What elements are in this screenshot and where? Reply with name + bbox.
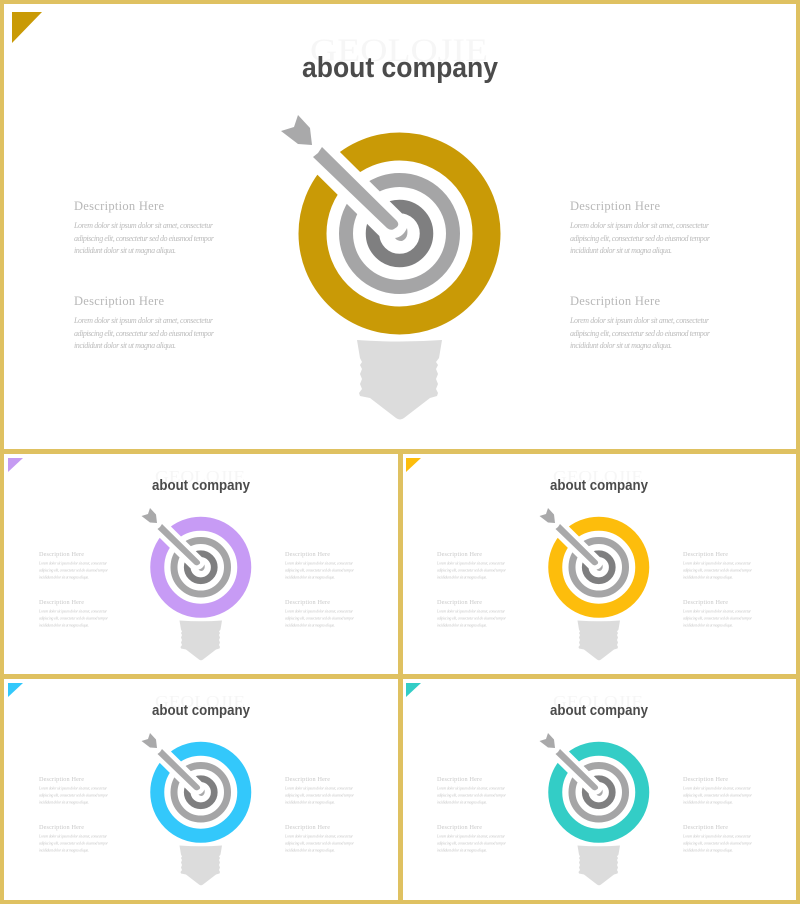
ghost heading: GEOLOJIE xyxy=(155,692,245,711)
text block: top right: adipiscing elit, consectetur sed do eiusmod tempor xyxy=(683,794,753,798)
text block: top right: adipiscing elit, consectetur sed do eiusmod tempor xyxy=(570,234,711,243)
text block: top left: Description Here xyxy=(437,776,482,783)
text block: bottom left: Description Here xyxy=(437,599,482,606)
ghost heading: GEOLOJIE xyxy=(553,467,643,486)
text block: bottom left xyxy=(436,824,507,852)
title: about company xyxy=(152,703,250,719)
text block: bottom right xyxy=(569,294,711,350)
text block: top right: incididunt dolor sit ut magna aliqua. xyxy=(683,800,733,804)
icon: lightbulb target with arrow xyxy=(281,115,486,420)
text block: bottom left: incididunt dolor sit ut magna aliqua. xyxy=(39,848,89,852)
text block: bottom left: adipiscing elit, consectetur sed do eiusmod tempor xyxy=(74,329,215,338)
text block: top left: adipiscing elit, consectetur sed do eiusmod tempor xyxy=(39,568,109,574)
text block: bottom right: Description Here xyxy=(683,599,728,606)
text block: bottom left xyxy=(38,599,109,628)
text block: top right: Description Here xyxy=(683,776,728,783)
text block: bottom left: incididunt dolor sit ut magna aliqua. xyxy=(74,341,176,350)
panel: teal slide xyxy=(406,683,753,885)
text block: top left: adipiscing elit, consectetur sed do eiusmod tempor xyxy=(74,234,215,243)
text block: bottom right: Lorem dolor sit ipsum dolor sit amet, consectetur xyxy=(569,316,710,325)
ghost heading: GEOLOJIE xyxy=(553,692,643,711)
text block: bottom left: Lorem dolor sit ipsum dolor sit amet, consectetur xyxy=(436,610,506,614)
text block: bottom right: Description Here xyxy=(285,599,330,606)
text block: top left: Lorem dolor sit ipsum dolor sit amet, consectetur xyxy=(436,562,506,566)
text block: bottom left: Lorem dolor sit ipsum dolor sit amet, consectetur xyxy=(73,316,214,325)
text block: bottom right: Lorem dolor sit ipsum dolor sit amet, consectetur xyxy=(284,834,354,840)
text block: bottom left: adipiscing elit, consectetur sed do eiusmod tempor xyxy=(437,616,507,622)
text block: top right xyxy=(569,199,711,255)
title: about company xyxy=(550,478,648,494)
text block: bottom right: incididunt dolor sit ut magna aliqua. xyxy=(683,624,733,628)
text block: bottom right: Description Here xyxy=(683,824,728,831)
text block: bottom right xyxy=(682,599,753,628)
text block: top right xyxy=(284,551,355,580)
text block: bottom right xyxy=(682,824,753,852)
title: about company xyxy=(302,52,498,84)
text block: bottom left: Lorem dolor sit ipsum dolor sit amet, consectetur xyxy=(38,834,108,840)
text block: top left: Lorem dolor sit ipsum dolor sit amet, consectetur xyxy=(73,221,214,230)
text block: bottom right: Lorem dolor sit ipsum dolor sit amet, consectetur xyxy=(284,610,354,614)
text block: bottom right: adipiscing elit, consectetur sed do eiusmod tempor xyxy=(285,616,355,622)
corner triangle xyxy=(8,458,23,472)
text block: bottom right: adipiscing elit, consectetur sed do eiusmod tempor xyxy=(570,329,711,338)
text block: bottom left: incididunt dolor sit ut magna aliqua. xyxy=(437,848,487,852)
text block: bottom left xyxy=(436,599,507,628)
text block: top left: incididunt dolor sit ut magna aliqua. xyxy=(39,576,89,580)
text block: top left xyxy=(436,551,507,580)
text block: top left: Description Here xyxy=(39,776,84,783)
text block: top left xyxy=(73,199,215,255)
text block: bottom left: incididunt dolor sit ut magna aliqua. xyxy=(39,624,89,628)
text block: bottom left: adipiscing elit, consectetur sed do eiusmod tempor xyxy=(39,616,109,622)
icon: lightbulb target with arrow xyxy=(540,733,642,885)
text block: bottom right: adipiscing elit, consectetur sed do eiusmod tempor xyxy=(285,842,355,846)
text block: bottom left: Description Here xyxy=(39,599,84,606)
text block: bottom left: Description Here xyxy=(74,294,164,308)
text block: bottom right: adipiscing elit, consectetur sed do eiusmod tempor xyxy=(683,842,753,846)
text block: bottom right: incididunt dolor sit ut magna aliqua. xyxy=(683,848,733,852)
text block: top left xyxy=(38,776,109,804)
text block: top right: adipiscing elit, consectetur sed do eiusmod tempor xyxy=(285,794,355,798)
title: about company xyxy=(152,478,250,494)
text block: top left: Lorem dolor sit ipsum dolor sit amet, consectetur xyxy=(436,786,506,792)
text block: top left: Lorem dolor sit ipsum dolor sit amet, consectetur xyxy=(38,562,108,566)
text block: top left: Description Here xyxy=(74,199,164,213)
text block: bottom right: Description Here xyxy=(285,824,330,831)
text block: bottom right: adipiscing elit, consectetur sed do eiusmod tempor xyxy=(683,616,753,622)
text block: bottom right: Lorem dolor sit ipsum dolor sit amet, consectetur xyxy=(682,610,752,614)
text block: top left: incididunt dolor sit ut magna aliqua. xyxy=(437,800,487,804)
text block: top right: Lorem dolor sit ipsum dolor sit amet, consectetur xyxy=(284,562,354,566)
text block: bottom left: Description Here xyxy=(39,824,84,831)
corner triangle xyxy=(406,683,421,697)
text block: top right: Lorem dolor sit ipsum dolor sit amet, consectetur xyxy=(569,221,710,230)
text block: bottom right: incididunt dolor sit ut magna aliqua. xyxy=(285,848,335,852)
text block: bottom left xyxy=(38,824,109,852)
text block: bottom left: Description Here xyxy=(437,824,482,831)
text block: top right: adipiscing elit, consectetur sed do eiusmod tempor xyxy=(683,568,753,574)
text block: top left: Description Here xyxy=(437,551,482,558)
panel: purple slide xyxy=(8,458,355,660)
corner triangle xyxy=(12,12,42,43)
text block: bottom right: incididunt dolor sit ut magna aliqua. xyxy=(285,624,335,628)
text block: top right: adipiscing elit, consectetur sed do eiusmod tempor xyxy=(285,568,355,574)
text block: bottom left: adipiscing elit, consectetur sed do eiusmod tempor xyxy=(39,842,109,846)
text block: top right: incididunt dolor sit ut magna aliqua. xyxy=(683,576,733,580)
corner triangle xyxy=(406,458,421,472)
text block: top left: Description Here xyxy=(39,551,84,558)
text block: top left: adipiscing elit, consectetur sed do eiusmod tempor xyxy=(437,568,507,574)
text block: top left: incididunt dolor sit ut magna aliqua. xyxy=(437,576,487,580)
text block: bottom right: Description Here xyxy=(570,294,660,308)
text block: top left xyxy=(38,551,109,580)
ghost heading: GEOLOJIE xyxy=(155,467,245,486)
text block: top right: incididunt dolor sit ut magna aliqua. xyxy=(570,246,672,255)
text block: top left: incididunt dolor sit ut magna aliqua. xyxy=(39,800,89,804)
text block: bottom left xyxy=(73,294,215,350)
text block: bottom right: Lorem dolor sit ipsum dolor sit amet, consectetur xyxy=(682,834,752,840)
text block: top right xyxy=(682,776,753,804)
icon: lightbulb target with arrow xyxy=(540,508,642,660)
text block: top left: Lorem dolor sit ipsum dolor sit amet, consectetur xyxy=(38,786,108,792)
panel: main slide xyxy=(12,12,711,420)
text block: bottom left: Lorem dolor sit ipsum dolor sit amet, consectetur xyxy=(436,834,506,840)
text block: top right: Lorem dolor sit ipsum dolor sit amet, consectetur xyxy=(682,562,752,566)
text block: top left xyxy=(436,776,507,804)
text block: top right: Lorem dolor sit ipsum dolor sit amet, consectetur xyxy=(284,786,354,792)
text block: top right: incididunt dolor sit ut magna aliqua. xyxy=(285,800,335,804)
text block: top left: adipiscing elit, consectetur sed do eiusmod tempor xyxy=(437,794,507,798)
text block: top right: Description Here xyxy=(285,776,330,783)
text block: bottom left: incididunt dolor sit ut magna aliqua. xyxy=(437,624,487,628)
text block: top left: adipiscing elit, consectetur sed do eiusmod tempor xyxy=(39,794,109,798)
corner triangle xyxy=(8,683,23,697)
ghost heading: GEOLOJIE xyxy=(310,33,488,69)
panel: blue slide xyxy=(8,683,355,885)
text block: bottom left: adipiscing elit, consectetur sed do eiusmod tempor xyxy=(437,842,507,846)
text block: top right xyxy=(284,776,355,804)
text block: bottom right: incididunt dolor sit ut magna aliqua. xyxy=(570,341,672,350)
text block: top left: incididunt dolor sit ut magna aliqua. xyxy=(74,246,176,255)
text block: top right: Description Here xyxy=(683,551,728,558)
text block: top right xyxy=(682,551,753,580)
icon: lightbulb target with arrow xyxy=(142,733,244,885)
icon: lightbulb target with arrow xyxy=(142,508,244,660)
text block: bottom right xyxy=(284,599,355,628)
text block: top right: Description Here xyxy=(285,551,330,558)
text block: bottom right xyxy=(284,824,355,852)
text block: top right: incididunt dolor sit ut magna aliqua. xyxy=(285,576,335,580)
text block: top right: Description Here xyxy=(570,199,660,213)
text block: bottom left: Lorem dolor sit ipsum dolor sit amet, consectetur xyxy=(38,610,108,614)
title: about company xyxy=(550,703,648,719)
text block: top right: Lorem dolor sit ipsum dolor sit amet, consectetur xyxy=(682,786,752,792)
panel: yellow slide xyxy=(406,458,753,660)
